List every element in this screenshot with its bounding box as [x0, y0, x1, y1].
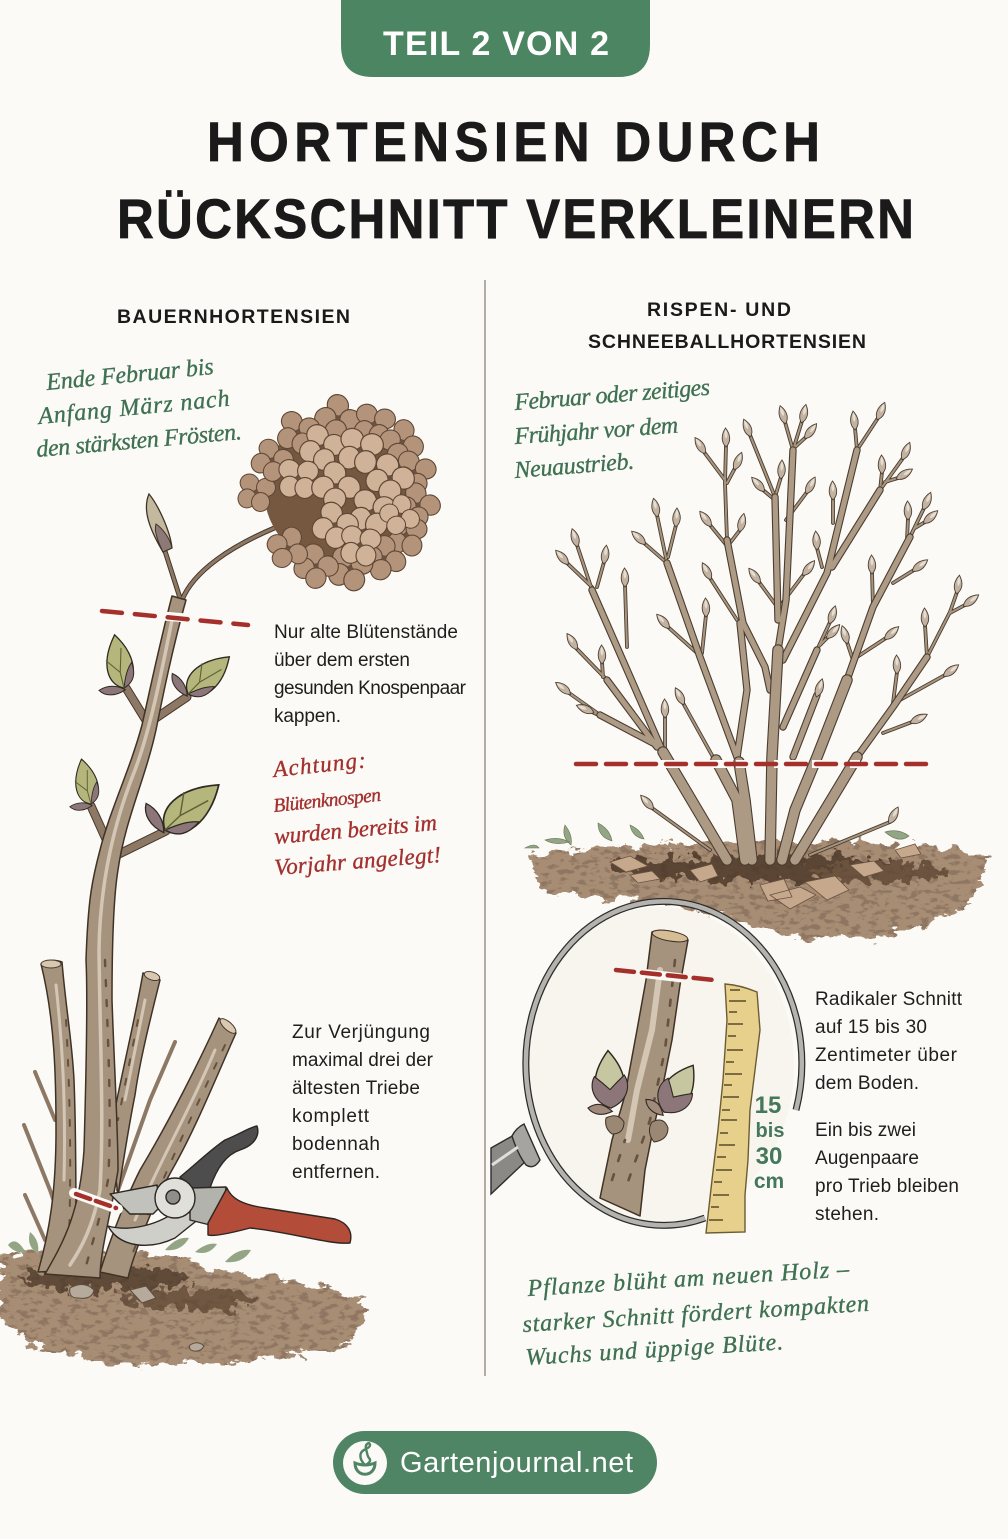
instruction text: rejuvenation: maximal drei der [292, 1050, 434, 1071]
magnifier handle [491, 1124, 540, 1194]
ruler [706, 984, 760, 1233]
bud: upper left [90, 633, 137, 697]
footer logo pill [333, 1431, 657, 1494]
instruction text: eye pairs: Augenpaare [815, 1148, 919, 1169]
branches [567, 418, 965, 860]
bud: stem tip [146, 494, 172, 552]
illustration: pruned shrub [553, 401, 981, 860]
instruction text: rejuvenation [292, 1022, 434, 1183]
bud: middle left [61, 757, 102, 812]
title [117, 111, 914, 251]
ruler label: 30 [756, 1143, 782, 1170]
illustration: old canes [24, 960, 238, 1278]
instruction text: eye pairs: pro Trieb bleiben [815, 1176, 959, 1197]
part badge [341, 0, 650, 77]
handwritten note: result: starker Schnitt fördert kompakten [522, 1291, 870, 1338]
bud: middle right [139, 760, 229, 847]
instruction text: radical cut [815, 989, 963, 1094]
cut line: lower [74, 1193, 118, 1209]
close-up stem [600, 928, 689, 1216]
handwritten note: timing [512, 375, 711, 484]
instruction text: flower heads: kappen. [274, 706, 341, 727]
illustration: magnifier [491, 901, 802, 1233]
instruction text: radical cut: Zentimeter über [815, 1045, 958, 1066]
warning note [270, 747, 442, 880]
close-up bud: left [585, 1050, 629, 1115]
warning note: Achtung: [270, 747, 367, 782]
heading: Bauernhortensien: BAUERNHORTENSIEN [117, 306, 350, 328]
instruction text: flower heads [274, 622, 467, 727]
cut line: close-up [616, 970, 714, 980]
footer logo pill: Gartenjournal.net [400, 1447, 633, 1479]
instruction text: rejuvenation: ältesten Triebe [292, 1078, 420, 1099]
handwritten note: result: Wuchs und üppige Blüte. [525, 1329, 784, 1371]
instruction text: flower heads: über dem ersten [274, 650, 410, 671]
instruction text: radical cut: auf 15 bis 30 [815, 1017, 927, 1038]
heading: Rispen- und Schneeballhortensien: SCHNEEBALLHORTENSIEN [588, 331, 866, 353]
handwritten note: timing: Neuaustrieb. [512, 449, 635, 484]
warning note: Blütenknospen [272, 785, 382, 817]
illustration: pruning shears [108, 1126, 351, 1245]
illustration: main stem with flower [45, 390, 444, 1278]
ruler label: 15 [755, 1092, 781, 1119]
instruction text: rejuvenation: Zur Verjüngung [292, 1022, 430, 1043]
instruction text: radical cut: Radikaler Schnitt [815, 989, 963, 1010]
ruler label [754, 1092, 784, 1193]
handwritten note: timing: Anfang März nach [35, 386, 231, 430]
instruction text: rejuvenation: entfernen. [292, 1162, 380, 1183]
buds [553, 401, 981, 826]
heading: Rispen- und Schneeballhortensien: RISPEN- UND [647, 299, 791, 321]
instruction text: flower heads: Nur alte Blütenstände [274, 622, 458, 643]
handwritten note: result: Pflanze blüht am neuen Holz – [526, 1256, 851, 1302]
instruction text: radical cut: dem Boden. [815, 1073, 919, 1094]
title: RÜCKSCHNITT VERKLEINERN [117, 188, 914, 251]
close-up bud: right [642, 1054, 708, 1126]
center divider [484, 280, 486, 1376]
panel: Bauernhortensien [0, 306, 467, 1365]
handwritten note: result [522, 1256, 870, 1371]
magnifier lens [526, 907, 794, 1223]
handwritten note: timing: den stärksten Frösten. [35, 419, 243, 463]
icon: plant in bowl [343, 1441, 387, 1485]
instruction text: flower heads: gesunden Knospenpaar [274, 678, 467, 699]
handwritten note: timing [35, 354, 243, 463]
dried flower head [234, 390, 444, 595]
cut line: shrub [576, 760, 934, 768]
instruction text: eye pairs: Ein bis zwei [815, 1120, 916, 1141]
handwritten note: timing: Frühjahr vor dem [513, 413, 679, 450]
bud: upper right [167, 638, 238, 707]
illustration: soil [0, 1232, 368, 1365]
panel: Rispen- und Schneeballhortensien [491, 299, 990, 1371]
instruction text: rejuvenation: bodennah [292, 1134, 380, 1155]
instruction text: rejuvenation: komplett [292, 1106, 370, 1127]
ruler label: bis [756, 1120, 784, 1142]
warning note: Vorjahr angelegt! [273, 842, 442, 880]
handwritten note: timing: Februar oder zeitiges [512, 375, 711, 416]
instruction text: eye pairs [815, 1120, 959, 1225]
cut line: upper [102, 611, 248, 625]
illustration: soil under shrub [525, 823, 990, 940]
heading: Rispen- und Schneeballhortensien [588, 299, 866, 353]
title: HORTENSIEN DURCH [207, 111, 820, 174]
part badge: TEIL 2 VON 2 [383, 25, 609, 63]
magnifier ring [526, 901, 802, 1225]
ruler label: cm [754, 1170, 784, 1193]
warning note: wurden bereits im [273, 810, 438, 849]
handwritten note: timing: Ende Februar bis [44, 354, 215, 396]
instruction text: eye pairs: stehen. [815, 1204, 879, 1225]
